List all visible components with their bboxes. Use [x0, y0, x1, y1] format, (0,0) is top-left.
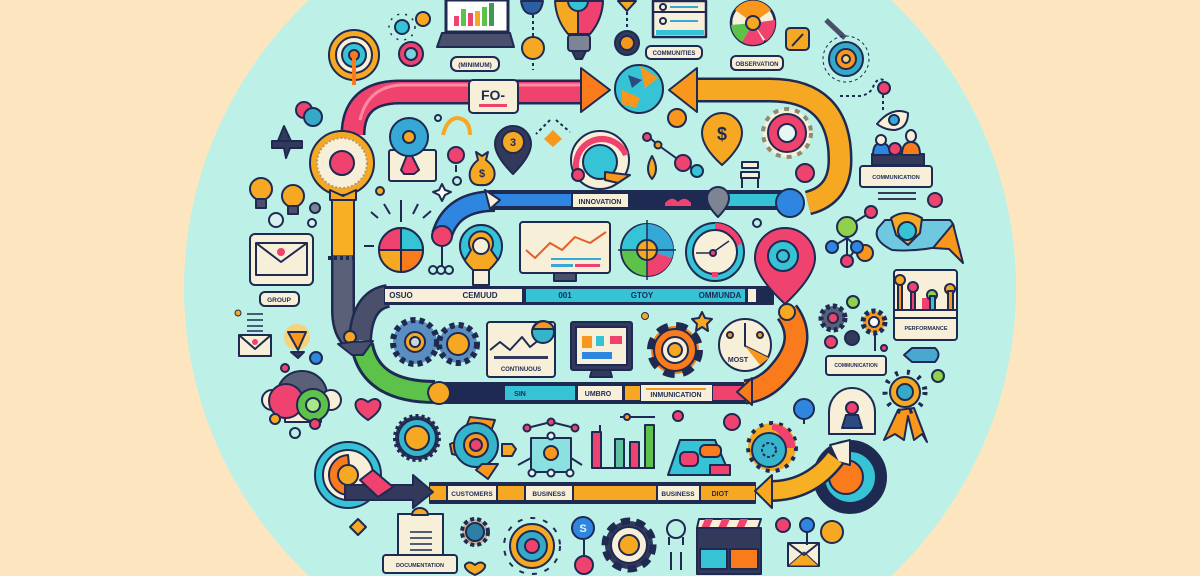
- chart: rainbow gauge: [571, 131, 630, 189]
- path: red top segment: [353, 85, 585, 135]
- icon: dark coin pin: 3: [510, 137, 516, 149]
- icon: capsule: [904, 348, 938, 362]
- icon: clapperboard: [697, 519, 761, 574]
- path: bar three: [436, 383, 748, 403]
- path: orange right curve: [745, 312, 796, 392]
- label: top left: (MINIMUM): [458, 62, 492, 69]
- icon: bottom heart: [465, 562, 485, 575]
- icon: grey dots: [269, 203, 320, 227]
- icon: orange teal target: [450, 417, 498, 479]
- icon: orange ball on dotted line: [522, 15, 544, 70]
- arrow: yellow bottom right: [755, 458, 835, 508]
- chart: left donut: [315, 442, 381, 508]
- icon: globe: [615, 65, 663, 113]
- icon: team: [872, 130, 924, 165]
- path: blue connector bar: INNOVATION: [579, 199, 621, 206]
- path: bottom bar: CUSTOMERS: [451, 491, 493, 498]
- icon: red balls: [673, 411, 740, 430]
- icon: teal orange ball: [532, 321, 554, 343]
- path: bottom bar: [430, 483, 755, 503]
- path: bar three: UMBRO: [585, 391, 612, 398]
- icon: ring dot: [290, 428, 300, 438]
- icon: orange dot junction: [428, 382, 450, 404]
- icon: orange hexagon: [502, 444, 516, 456]
- icon: envelope: [250, 234, 313, 285]
- icon: red pin: [448, 147, 464, 172]
- icon: red ball: [796, 164, 814, 182]
- icon: small mail: [239, 335, 271, 356]
- icon: desktop monitor: [571, 322, 632, 377]
- icon: small ring: [753, 219, 761, 227]
- path: middle bar: [360, 287, 773, 340]
- path: middle bar: GTOY: [631, 291, 654, 300]
- icon: glowing bulb: [284, 324, 310, 358]
- icon: red ring gear: [763, 109, 811, 157]
- label: right top: [731, 56, 783, 70]
- icon: medal: [884, 372, 927, 442]
- label: right middle: COMMUNICATION: [834, 363, 878, 369]
- icon: color wheel: [731, 1, 775, 45]
- icon: small bulb left: [250, 178, 272, 208]
- path: middle bar: OMMUNDA: [699, 291, 742, 300]
- chart: pie: [379, 228, 423, 272]
- icon: magnifier target: [823, 20, 869, 82]
- icon: pie rays: [364, 200, 431, 246]
- icon: cloud with coin: [877, 213, 954, 250]
- icon: coin gear: [395, 416, 439, 460]
- icon: orange target with triangle: [615, 1, 639, 55]
- text block: short lines: [247, 314, 263, 331]
- icon: ball cluster bottom: [776, 518, 843, 545]
- icon: chair: [741, 162, 759, 188]
- path: blue connector bar: [442, 190, 790, 235]
- icon: yellow square: [786, 28, 809, 50]
- icon: teal gear button: [748, 423, 796, 471]
- label: document caption: [383, 555, 457, 573]
- icon: star: [692, 312, 712, 331]
- icon: orange diamond: [350, 519, 366, 535]
- path: bottom bar: DIOT: [712, 491, 729, 498]
- icon: blue circle: [521, 1, 543, 14]
- label: center top: COMMUNITIES: [653, 51, 695, 57]
- icon: orange ball: [416, 12, 430, 26]
- arrow: orange right: [581, 68, 610, 112]
- icon: clock: MOST: [728, 357, 749, 364]
- icon: small bulb right: [282, 185, 304, 214]
- chart: column bars: [592, 414, 655, 468]
- icon: person dome card: [829, 388, 875, 434]
- path: middle bar: 001: [558, 291, 572, 300]
- icon: light bulb: [555, 1, 603, 59]
- label: FO: [469, 80, 518, 113]
- icon: yellow arch: [443, 118, 470, 135]
- text block: team note: [878, 192, 916, 200]
- chart: bar card: [894, 270, 957, 340]
- path: green lower left curve: [362, 345, 435, 392]
- icon: molecule: [643, 133, 703, 179]
- icon: large bulb: [460, 225, 502, 285]
- icon: money bag: [470, 152, 495, 185]
- icon: dollar coin: [572, 517, 594, 556]
- icon: red ball: [928, 193, 942, 207]
- icon: network: [826, 206, 877, 267]
- label: document caption: DOCUMENTATION: [396, 563, 444, 569]
- icon: twin small gears: [821, 296, 887, 351]
- icon: three rings: [429, 246, 453, 274]
- icon: eye: [877, 111, 908, 130]
- icon: dollar coin: S: [579, 523, 587, 535]
- icon: red ring: [399, 42, 423, 66]
- icon: seal: [310, 131, 374, 200]
- path: middle bar: OSUO: [389, 291, 413, 300]
- icon: blue ball pin: [794, 399, 814, 424]
- icon: heart: [356, 399, 380, 420]
- icon: pink dot: [432, 226, 452, 246]
- label: right middle: [826, 356, 886, 375]
- label: right top: OBSERVATION: [735, 62, 779, 68]
- chart: line monitor: [520, 222, 610, 281]
- arrow: orange left: [669, 68, 697, 112]
- chart: line card: CONTINUOUS: [501, 367, 541, 373]
- icon: navy gear bottom: [605, 521, 653, 569]
- icon: paper plane: [933, 224, 963, 263]
- icon: dollar pin: [702, 113, 742, 165]
- label: team caption: [860, 166, 932, 187]
- label: envelope caption: GROUP: [267, 297, 292, 304]
- icon: blue and red dots: [281, 352, 322, 372]
- icon: envelope bottom: [788, 543, 819, 566]
- icon: ribbon badge: [389, 118, 436, 181]
- icon: key ring: [667, 520, 685, 570]
- chart: line card: [487, 322, 555, 377]
- arrow: navy bottom: [345, 470, 433, 508]
- icon: connected card: [518, 418, 582, 476]
- icon: orange ball: [668, 109, 686, 127]
- label: FO: FO-: [481, 87, 505, 103]
- label: team caption: COMMUNICATION: [872, 175, 920, 181]
- icon: small gear: [462, 519, 488, 545]
- icon: pin cluster: [262, 371, 341, 429]
- icon: money bag: $: [479, 168, 485, 180]
- icon: clock: [719, 319, 771, 371]
- label: top left: [451, 57, 499, 71]
- arrow: navy junction: [338, 331, 373, 355]
- icon: twin large gears: [393, 320, 477, 364]
- chart: right donut: [814, 440, 886, 513]
- path: bar three: SIN: [514, 391, 526, 398]
- teal circle panel: [184, 0, 1016, 576]
- icon: orange dot: [235, 310, 241, 316]
- icon: red coin: [575, 556, 593, 574]
- path: yellow stem and grey descent: [328, 190, 358, 342]
- icon: rayed sun: [504, 518, 560, 574]
- icon: dollar pin: $: [717, 124, 727, 144]
- path: bar three: INMUNICATION: [650, 392, 702, 399]
- icon: diamond: [536, 120, 570, 147]
- icon: blue bar end: [776, 189, 804, 217]
- icon: orange dot: [642, 312, 648, 320]
- icon: large map pin: [755, 228, 815, 320]
- icon: list card: [653, 1, 706, 37]
- path: bottom bar: BUSINESS: [661, 491, 695, 498]
- icon: small markers: [376, 115, 461, 201]
- chart: bar card: PERFORMANCE: [904, 326, 948, 332]
- path: yellow top right segment: [690, 90, 840, 203]
- arrow: orange head: [737, 378, 752, 405]
- path: bottom bar: BUSINESS: [532, 491, 566, 498]
- icon: small sun: [389, 14, 415, 40]
- path: middle bar: CEMUUD: [462, 291, 498, 300]
- icon: plane: [272, 126, 302, 158]
- icon: green ball: [932, 370, 944, 382]
- icon: gauge dial: [686, 223, 744, 281]
- icon: radar target: [618, 220, 676, 280]
- icon: document: [398, 508, 443, 556]
- icon: laptop: [437, 0, 514, 47]
- icon: target pin: [329, 30, 379, 85]
- icon: colored blocks: [668, 440, 730, 475]
- label: envelope caption: [260, 292, 299, 306]
- icon: dashed red ball: [840, 79, 890, 110]
- label: center top: [646, 46, 702, 59]
- icon: orange gear: [651, 326, 699, 374]
- icon: two balls: [296, 102, 322, 126]
- icon: grey pin on bar: [707, 187, 729, 217]
- icon: dark coin pin: [495, 126, 531, 174]
